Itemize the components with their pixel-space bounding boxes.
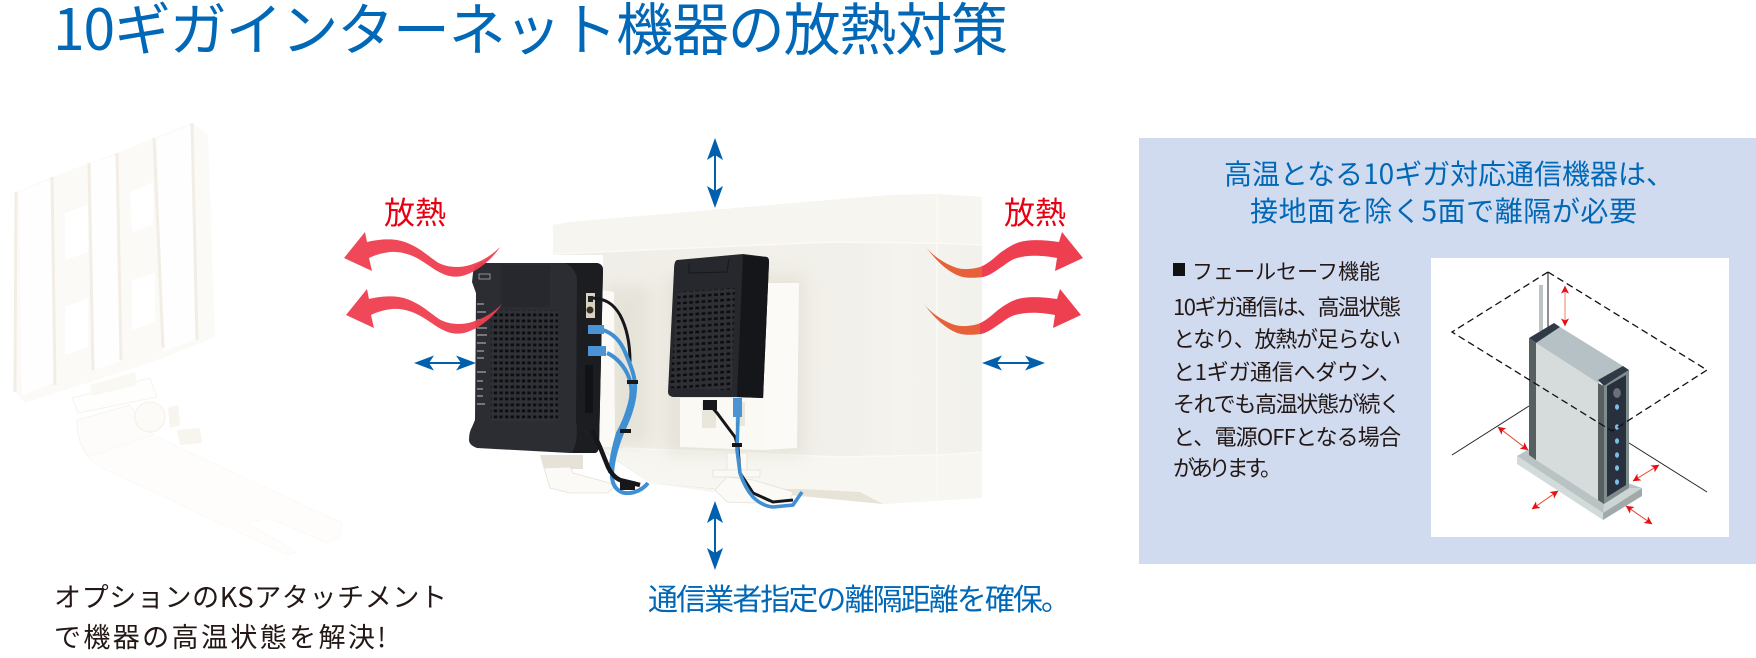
bracket columns: [19, 125, 197, 395]
right mounting plate: [764, 283, 799, 450]
caption: KS attachment: で機器の高温状態を解決!: [54, 616, 386, 655]
failsafe body text: 10ギガ通信は、高温状態: [1173, 290, 1401, 322]
antenna: [1539, 285, 1543, 331]
bracket panel: [15, 123, 215, 403]
caption: KS attachment: オプションのKSアタッチメント: [54, 576, 447, 615]
failsafe body text: と、電源OFFとなる場合: [1173, 420, 1401, 452]
panel heading: 高温となる10ギガ対応通信機器は、: [1224, 153, 1674, 193]
arrow: clearance left: [414, 356, 476, 370]
photo: KS attachment bracket: [15, 123, 342, 555]
arrow: clearance above: [707, 138, 723, 208]
bracket windows: [65, 182, 155, 355]
left mounting plate: [602, 290, 615, 447]
router 1 cables: [593, 298, 630, 362]
failsafe body text: [1173, 290, 1401, 483]
clearance plane dashed: [1452, 272, 1707, 431]
caption: KS attachment: [54, 576, 447, 655]
panel: five-side clearance: [1139, 138, 1756, 564]
label: heat dissipation right: 放熱: [1004, 188, 1066, 233]
joint: [77, 405, 153, 457]
panel heading: [1224, 153, 1674, 230]
base plate: [1517, 449, 1642, 513]
router body: [1536, 343, 1598, 500]
router LEDs: [1613, 388, 1621, 485]
photo: equipment box with routers: [469, 194, 982, 507]
bracket arm: [88, 435, 342, 555]
heat arrows: left: [344, 232, 502, 334]
router 1: [469, 263, 603, 453]
arrow: clearance right: [982, 356, 1045, 370]
mount 2: [713, 453, 760, 477]
failsafe body text: があります。: [1173, 451, 1282, 483]
failsafe body text: と1ギガ通信へダウン、: [1173, 355, 1401, 387]
white enclosure: [553, 194, 982, 504]
red clearance arrows: [1498, 286, 1659, 524]
failsafe heading: フェールセーフ機能: [1192, 256, 1380, 286]
heat arrows: right: [924, 232, 1083, 335]
mount 1: [540, 455, 583, 469]
soft shadows: [604, 275, 805, 455]
floor lines: [1452, 406, 1707, 492]
arrow: clearance below: [707, 501, 723, 570]
mount bar: [72, 378, 157, 413]
router 2 cables: [710, 405, 793, 502]
router 2: [668, 254, 769, 398]
label: heat dissipation left: 放熱: [384, 188, 446, 233]
panel heading: 接地面を除く5面で離隔が必要: [1250, 190, 1637, 230]
illustration: router clearance: [1431, 258, 1729, 537]
caption: clearance distance: 通信業者指定の離隔距離を確保。: [648, 575, 1071, 619]
failsafe body text: それでも高温状態が続く: [1173, 387, 1401, 419]
failsafe body text: となり、放熱が足らない: [1173, 322, 1401, 354]
